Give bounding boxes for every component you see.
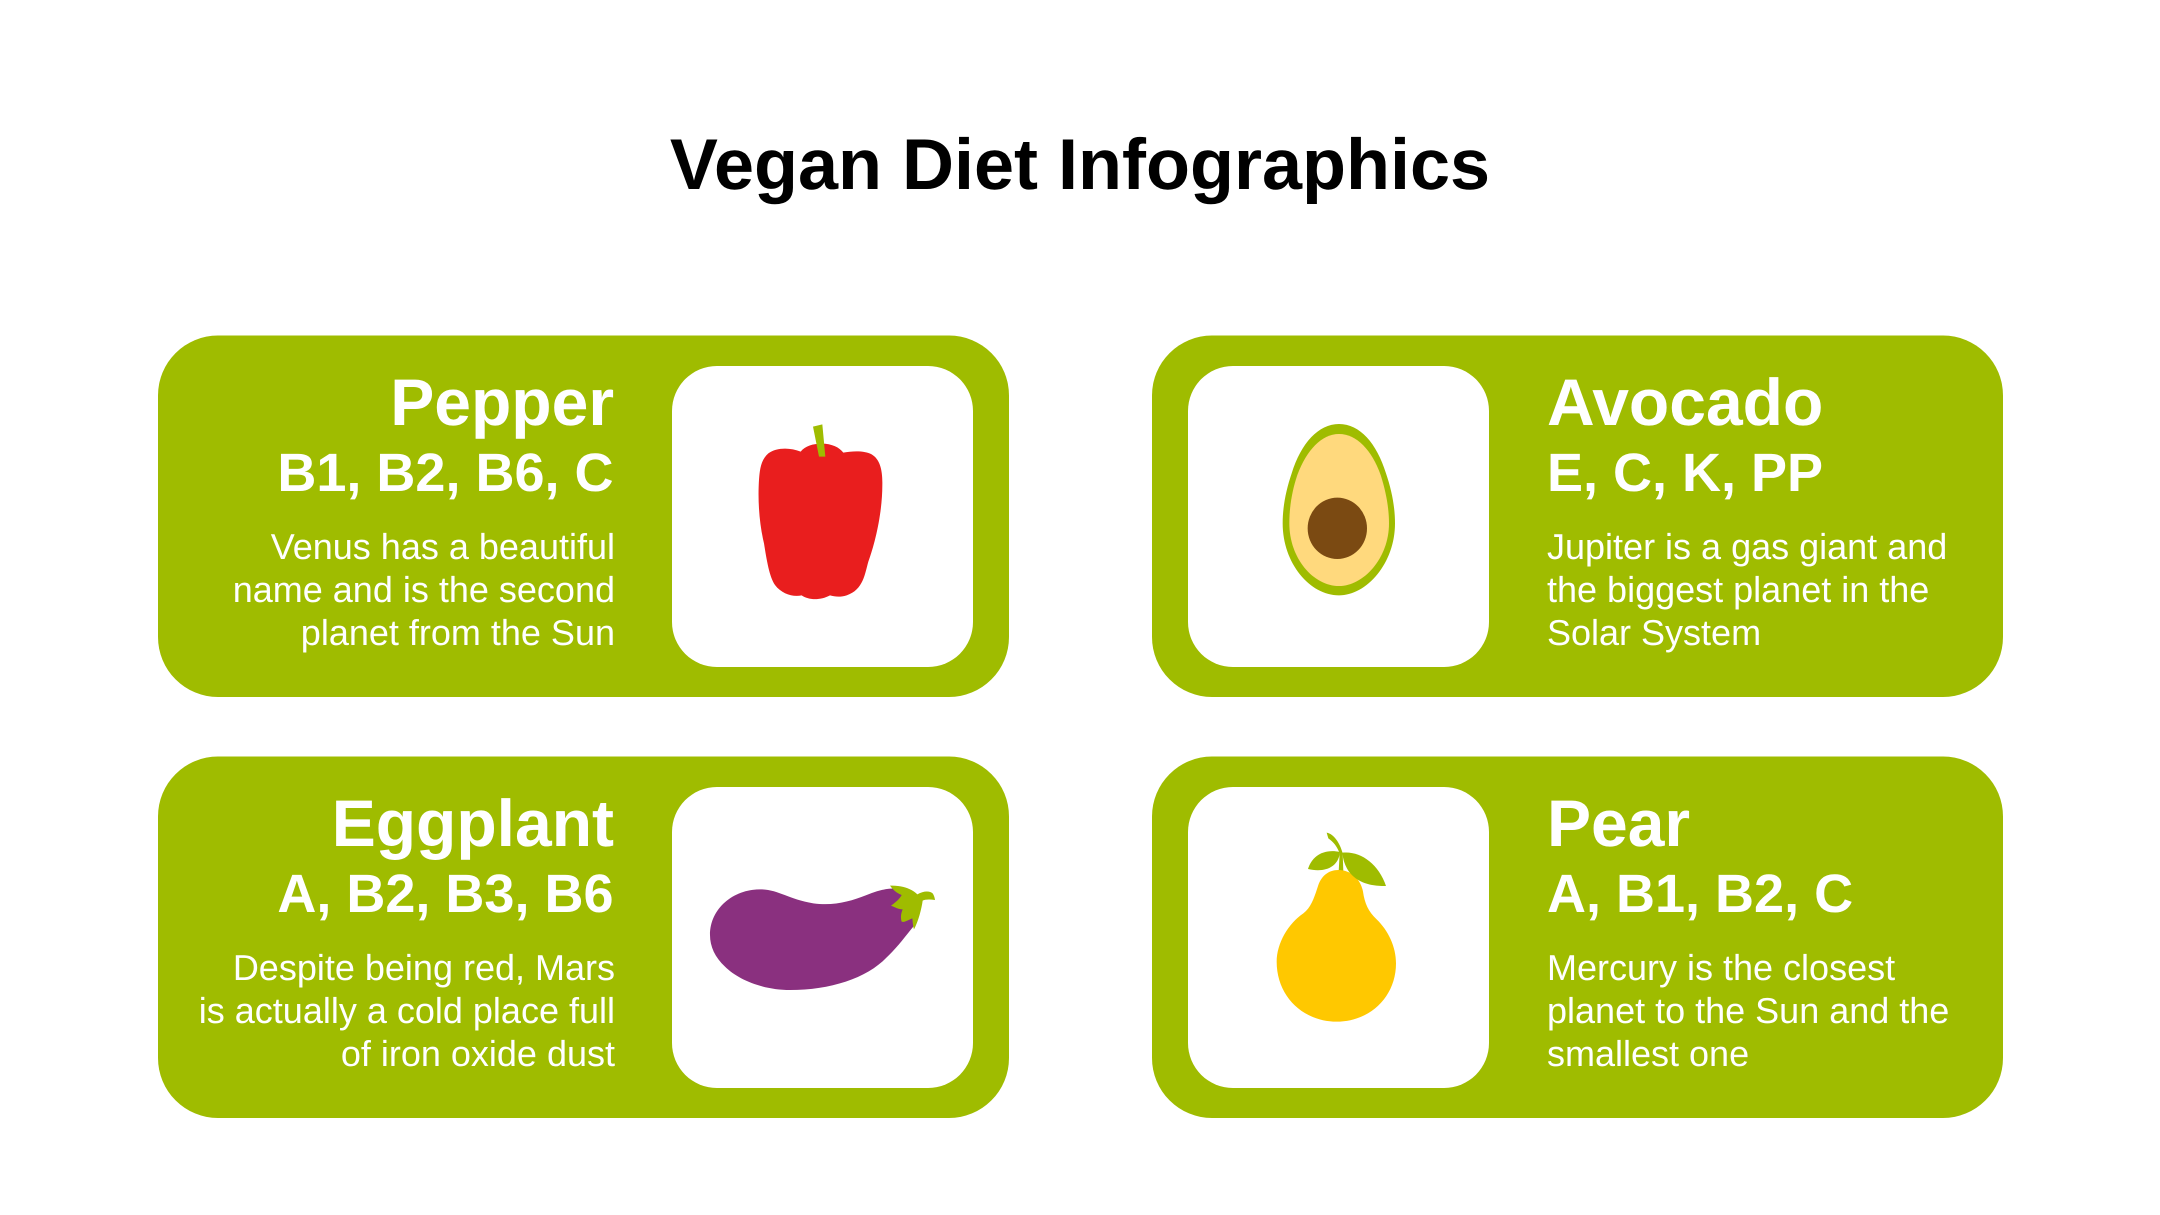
eggplant description: is actually a cold place full	[199, 990, 615, 1031]
avocado description: Solar System	[1547, 612, 1761, 653]
pepper description: planet from the Sun	[301, 612, 615, 653]
panel: pepper	[158, 336, 1009, 697]
avocado description: the biggest planet in the	[1547, 569, 1929, 610]
icon tile: pepper	[672, 366, 973, 667]
icon tile: eggplant	[672, 787, 973, 1088]
panel: eggplant	[158, 756, 1009, 1118]
icon: avocado	[1283, 424, 1395, 595]
panel: pear	[1152, 756, 2003, 1118]
pepper description: Venus has a beautiful	[271, 526, 615, 567]
eggplant description: of iron oxide dust	[341, 1033, 615, 1074]
pepper description: name and is the second	[233, 569, 615, 610]
eggplant vitamins: A, B2, B3, B6	[277, 864, 614, 924]
title: Vegan Diet Infographics	[670, 125, 1490, 205]
icon: eggplant	[710, 886, 935, 990]
pepper vitamins: B1, B2, B6, C	[277, 443, 614, 503]
icon: pepper	[759, 424, 882, 599]
pear name: Pear	[1547, 786, 1690, 860]
avocado vitamins: E, C, K, PP	[1547, 443, 1823, 503]
pepper name: Pepper	[390, 365, 614, 439]
panel: avocado	[1152, 336, 2003, 697]
pear description: planet to the Sun and the	[1547, 990, 1949, 1031]
avocado description: Jupiter is a gas giant and	[1547, 526, 1947, 567]
icon: pear	[1277, 833, 1396, 1022]
icon tile: pear	[1188, 787, 1489, 1088]
eggplant description: Despite being red, Mars	[233, 947, 615, 988]
pear vitamins: A, B1, B2, C	[1547, 864, 1853, 924]
pear description: smallest one	[1547, 1033, 1749, 1074]
icon tile: avocado	[1188, 366, 1489, 667]
eggplant name: Eggplant	[332, 786, 614, 860]
pear description: Mercury is the closest	[1547, 947, 1895, 988]
avocado name: Avocado	[1547, 365, 1823, 439]
